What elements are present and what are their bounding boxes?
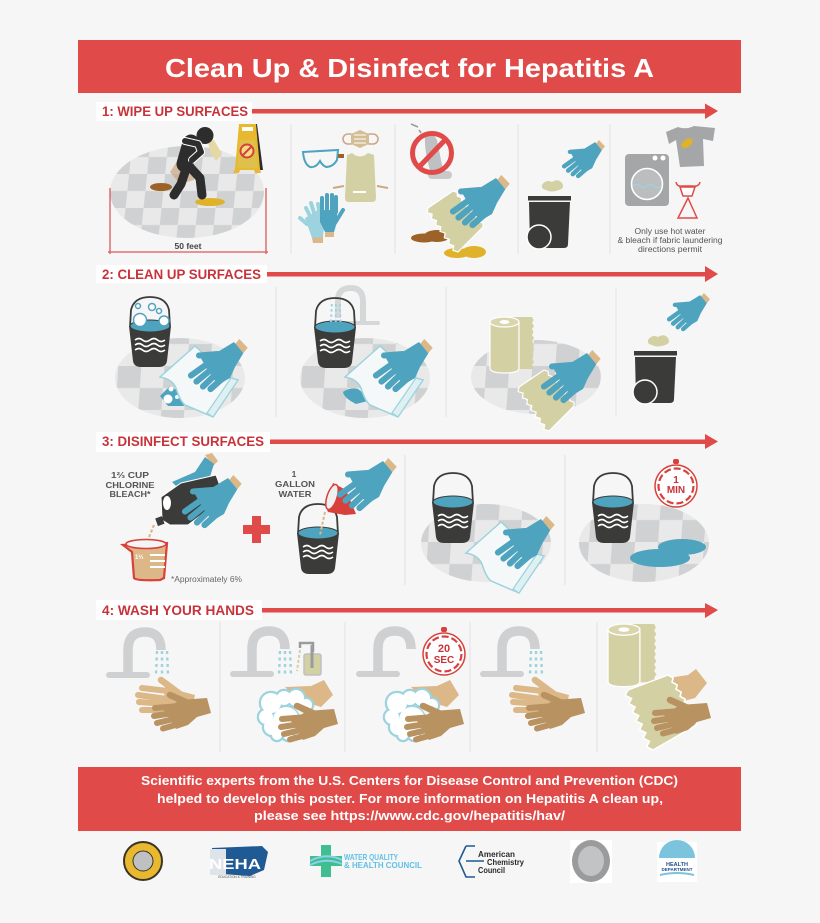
- panel: no vacuum and wipe spill: [411, 124, 510, 258]
- logo: Health Department: HEALTH: [666, 862, 688, 868]
- faucet: [483, 631, 535, 674]
- faucet: [359, 631, 411, 674]
- logo: NEHA: [209, 846, 268, 879]
- stopwatch 1 min: 1: [673, 475, 679, 486]
- gloves: [300, 195, 343, 243]
- mask: [343, 130, 378, 148]
- front glove: [185, 475, 242, 525]
- footer banner: Scientific experts from the U.S. Centers for Disease Control and Prevention (CDC): [141, 773, 678, 788]
- panel: dispose: [633, 293, 710, 404]
- logo: Water Quality & Health Council: & HEALTH COUNCIL: [344, 860, 422, 870]
- laundry note: directions permit: [638, 245, 703, 254]
- water puddle: [343, 388, 372, 404]
- glove: [376, 339, 433, 389]
- section heading 3 with arrow: 3: DISINFECT SURFACES: [102, 434, 264, 449]
- stopwatch 20 sec: [423, 627, 465, 675]
- faucet: [233, 631, 285, 674]
- washing machine: [625, 154, 669, 206]
- bleach label: BLEACH*: [110, 489, 151, 499]
- spills: [150, 183, 225, 206]
- section heading 2 with arrow: [96, 265, 718, 283]
- laundry note: [618, 227, 722, 254]
- footer banner: [78, 767, 741, 831]
- footer banner: helped to develop this poster. For more information on Hepatitis A clean up,: [157, 791, 663, 806]
- goggles: [303, 150, 344, 167]
- hands with foam: [258, 680, 338, 741]
- panel: paper towels: [471, 317, 601, 431]
- logo: Water Quality & Health Council: [310, 845, 422, 877]
- faucet: [338, 288, 378, 323]
- bleach label: [106, 470, 155, 499]
- glove: [498, 516, 555, 566]
- water drops: [331, 304, 341, 323]
- bleach label: 1⅔ CUP: [111, 470, 149, 480]
- panel dividers: [220, 124, 616, 752]
- person being sick: [170, 127, 222, 195]
- tissue: [648, 335, 669, 346]
- footnote: *Approximately 6%: [171, 575, 242, 584]
- water label: [275, 469, 315, 499]
- paper sheet: [518, 370, 574, 431]
- water: [279, 651, 291, 675]
- trash bin: [527, 196, 571, 249]
- logo: NEHA: EDUCATION & TRAINING: [218, 875, 256, 879]
- cloth: [160, 346, 238, 417]
- laundry symbols: [676, 182, 700, 218]
- section heading 4 with arrow: 4: WASH YOUR HANDS: [102, 603, 254, 618]
- dark hand: [654, 700, 711, 734]
- panel: rinse with water: [300, 288, 433, 418]
- logo: American Chemistry Council: Council: [478, 865, 505, 875]
- title banner: [78, 40, 741, 93]
- title banner: Clean Up & Disinfect for Hepatitis A: [165, 53, 654, 83]
- bleach bottle: [155, 475, 219, 526]
- checkered floor: [110, 146, 264, 238]
- floor: [421, 504, 551, 582]
- tissue: [542, 180, 563, 192]
- paper towel roll: [608, 624, 656, 687]
- panel: rinse hands: [483, 631, 585, 729]
- red cup: [323, 483, 356, 515]
- bleach stream: [147, 525, 154, 542]
- floor: [579, 504, 709, 582]
- wipe paper: [427, 191, 483, 252]
- panel: apply disinfectant: [421, 473, 555, 593]
- glove: [669, 293, 710, 329]
- t-shirt: [666, 126, 715, 167]
- logo: Water Quality & Health Council: WATER QUALITY: [344, 852, 398, 862]
- light hand: [668, 669, 707, 702]
- panel: laundry: [618, 126, 722, 254]
- panel: soapy bucket and wipe: [115, 297, 248, 418]
- logo: American Chemistry Council: American: [478, 849, 515, 859]
- floor: [471, 340, 601, 414]
- stopwatch 1 min: MIN: [667, 485, 685, 496]
- panel: wet hands: [109, 632, 211, 729]
- panel: wait one minute: [579, 459, 709, 582]
- panel: water gallon: [275, 458, 397, 574]
- glove: [340, 458, 397, 508]
- panel: bleach measure: [106, 453, 242, 584]
- panel: protective equipment: [300, 130, 388, 243]
- stopwatch 20 sec: SEC: [434, 655, 454, 666]
- bucket: [592, 473, 634, 543]
- no vacuum sign: [411, 124, 452, 179]
- 50 feet measurement: 50 feet: [175, 241, 202, 251]
- hands: [512, 680, 585, 729]
- section heading 1 with arrow: 1: WIPE UP SURFACES: [102, 104, 248, 119]
- 50 feet measurement: [108, 188, 268, 254]
- water: [156, 651, 168, 675]
- laundry note: & bleach if fabric laundering: [618, 236, 722, 245]
- cloth: [345, 346, 423, 417]
- section heading 2 with arrow: 2: CLEAN UP SURFACES: [102, 267, 261, 282]
- blue glove: [453, 175, 510, 225]
- bucket: [432, 473, 474, 543]
- soap dispenser: [297, 643, 321, 675]
- section heading 4 with arrow: [96, 600, 718, 620]
- plus sign: [243, 516, 270, 543]
- panel: soap and lather: [233, 631, 338, 741]
- section heading 3 with arrow: [96, 432, 718, 452]
- bleach label: CHLORINE: [106, 480, 155, 490]
- soapy patch: [160, 386, 184, 406]
- spills: [411, 230, 486, 258]
- trash bin: [633, 351, 677, 404]
- logo: NEHA: NEHA: [209, 856, 261, 873]
- bucket: [297, 504, 339, 574]
- stopwatch 1 min: [655, 459, 697, 507]
- floor: [300, 338, 430, 418]
- stopwatch 20 sec: 20: [438, 643, 450, 655]
- cloth: [466, 522, 544, 593]
- glove: [544, 350, 601, 400]
- glove: [191, 339, 248, 389]
- bucket with suds: [129, 297, 171, 367]
- back glove: [172, 453, 218, 490]
- puddle: [630, 539, 706, 567]
- water: [530, 651, 542, 675]
- floor: [115, 338, 245, 418]
- hands with foam: [384, 680, 464, 741]
- logo: American Chemistry Council: Chemistry: [487, 857, 524, 867]
- footer banner: please see https://www.cdc.gov/hepatitis/hav/: [254, 808, 565, 823]
- paper sheet: [611, 669, 709, 756]
- water label: 1: [292, 469, 297, 479]
- bucket: [314, 298, 356, 368]
- logo: Health Department: DEPARTMENT: [662, 867, 693, 872]
- apron: [333, 153, 388, 202]
- water label: GALLON: [275, 479, 315, 489]
- panel: dry with paper towel: [608, 624, 711, 756]
- section heading 1 with arrow: [96, 102, 718, 121]
- logo: Health Department: [657, 840, 697, 882]
- water label: WATER: [278, 489, 312, 499]
- panel: dispose glove and waste: [527, 140, 605, 249]
- water stream: [320, 512, 325, 535]
- panel: scrub 20 seconds: [359, 627, 465, 741]
- logo: city seal: [570, 840, 612, 883]
- faucet: [109, 632, 161, 675]
- logo: American Chemistry Council: [459, 846, 524, 877]
- laundry note: Only use hot water: [634, 227, 706, 236]
- logo: seal one: [124, 842, 162, 880]
- measuring cup: 1⅔: [135, 555, 143, 561]
- glove: [564, 140, 605, 176]
- hands: [138, 680, 211, 729]
- paper towel roll: [490, 317, 534, 373]
- panel: wipe step 1, perimeter and wet-floor sign: [108, 124, 268, 254]
- wet floor sign: [233, 124, 263, 173]
